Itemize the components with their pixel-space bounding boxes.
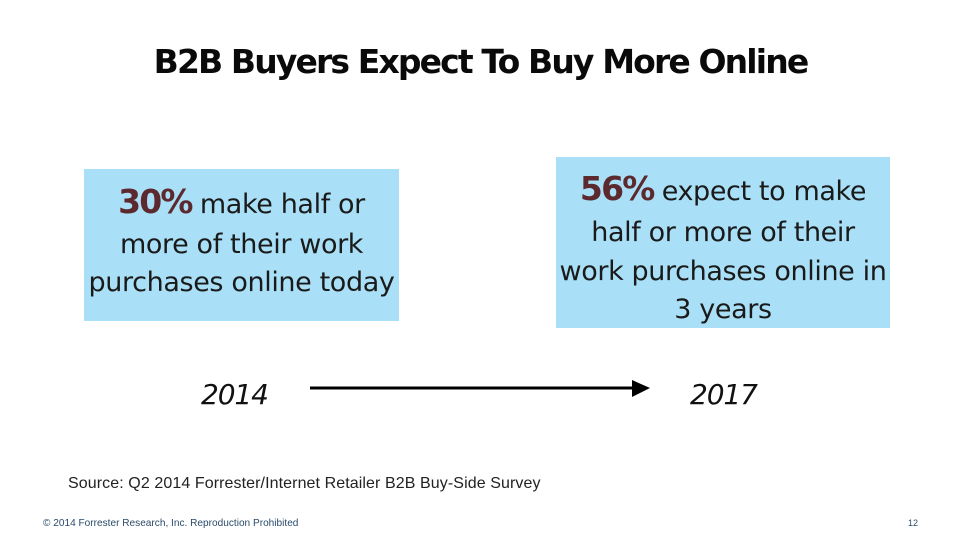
- footer copyright: © 2014 Forrester Research, Inc. Reproduction Prohibited: [43, 518, 298, 529]
- label: 2017: 2017: [690, 378, 757, 411]
- text: 56% statistic: 3 years: [674, 294, 772, 325]
- text: 30% statistic: [89, 182, 394, 298]
- text: 56% statistic: work purchases online in: [560, 256, 886, 287]
- text: 30% statistic: more of their work: [120, 229, 363, 260]
- page number: 12: [908, 518, 918, 528]
- text: 56% statistic: [560, 169, 886, 325]
- text: 30% statistic: 30% make half or: [118, 182, 365, 221]
- panel: 2017 statistic: [556, 157, 890, 328]
- text: 30% statistic: purchases online today: [89, 267, 394, 298]
- text: 56% statistic: 56% expect to make: [580, 169, 866, 208]
- arrow: 2014 to 2017: [310, 380, 650, 397]
- text: 56% statistic: half or more of their: [591, 217, 855, 248]
- source note: Source: Q2 2014 Forrester/Internet Retailer B2B Buy-Side Survey: [68, 475, 541, 492]
- title: B2B Buyers Expect To Buy More Online: [154, 42, 807, 81]
- label: 2014: 2014: [201, 378, 268, 411]
- panel: 2014 statistic: [84, 169, 399, 321]
